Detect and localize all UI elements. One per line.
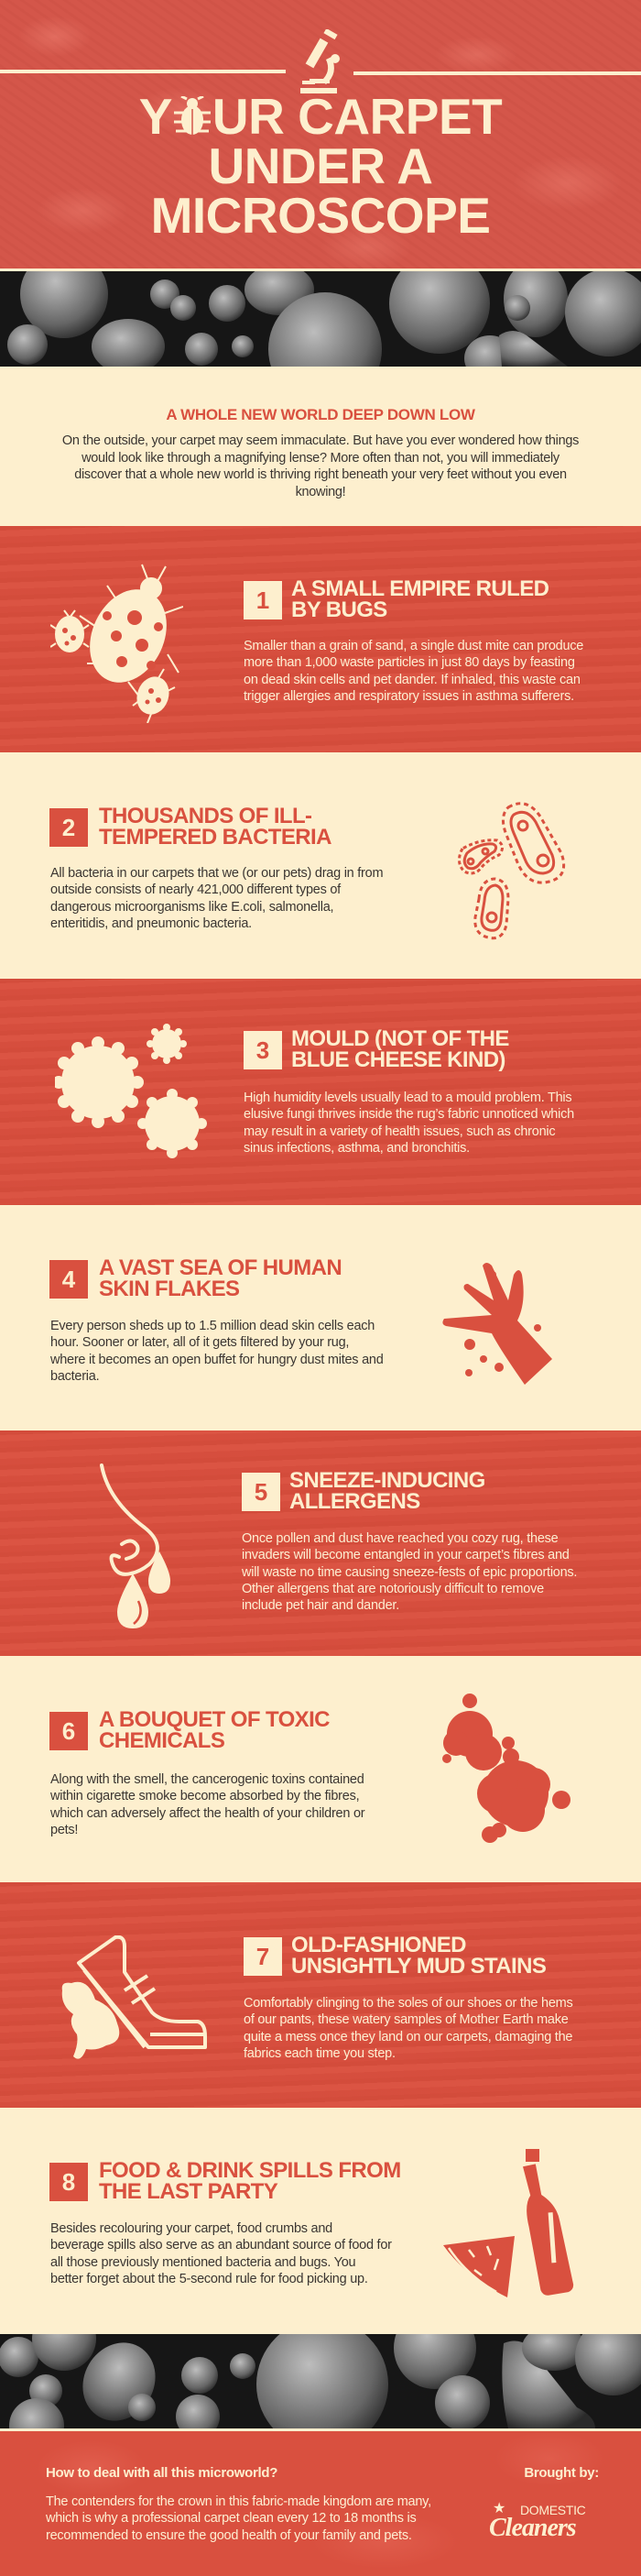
text 7: of our pants, these watery samples of Mother Earth make [244, 2012, 569, 2027]
number 2: 2 [62, 814, 75, 841]
text 5: Once pollen and dust have reached you cozy rug, these [242, 1531, 558, 1546]
number 8 [49, 2163, 88, 2201]
text 7: quite a mess once they land on our carpets, damaging the [244, 2030, 572, 2044]
micro image band top [0, 271, 641, 367]
text 4: hour. Sooner or later, all of it gets filtered by your rug, [50, 1335, 349, 1350]
text 8: Besides recolouring your carpet, food crumbs and [50, 2221, 332, 2236]
footer heading: How to deal with all this microworld? [46, 2465, 277, 2481]
intro text: On the outside, your carpet may seem immaculate. But have you ever wondered how things [62, 433, 579, 448]
text 2 [50, 866, 383, 931]
text 4: Every person sheds up to 1.5 million dead skin cells each [50, 1319, 375, 1333]
text 7 [244, 1996, 573, 2061]
text 2: All bacteria in our carpets that we (or our pets) drag in from [50, 866, 383, 881]
number 6: 6 [62, 1717, 75, 1745]
text 1: more than 1,000 waste particles in just 80 days by feasting [244, 655, 575, 670]
text 8: better forget about the 5-second rule for food picking up. [50, 2272, 368, 2286]
title [139, 88, 502, 244]
text 7: Comfortably clinging to the soles of our shoes or the hems [244, 1996, 572, 2011]
heading 4: SKIN FLAKES [99, 1277, 239, 1301]
panel: 2 bacteria [0, 752, 641, 979]
text 3: sinus infections, asthma, and bronchitis. [244, 1141, 470, 1156]
icon: bacteria [458, 802, 566, 940]
logo: domestic cleaners [489, 2501, 586, 2542]
text 4 [50, 1319, 384, 1384]
number 6 [49, 1712, 88, 1750]
heading 1 [291, 576, 549, 622]
number 1 [244, 581, 282, 619]
number 4: 4 [62, 1266, 75, 1293]
micro image band bottom [0, 2334, 641, 2428]
text 1 [244, 639, 583, 704]
text 6: Along with the smell, the cancerogenic toxins contained [50, 1772, 364, 1787]
heading 8: THE LAST PARTY [99, 2179, 277, 2204]
heading 7: OLD-FASHIONED [291, 1933, 466, 1957]
text 1: Smaller than a grain of sand, a single dust mite can produce [244, 639, 583, 653]
icon: microscope [300, 29, 340, 93]
title: UNDER A [208, 137, 433, 194]
text 7: fabrics each time you step. [244, 2046, 396, 2061]
icon: nose and drops [100, 1463, 170, 1628]
number 2 [49, 808, 88, 847]
footer text: recommended to ensure the good health of your family and pets. [46, 2528, 412, 2543]
heading 2 [99, 804, 331, 850]
text 5: invaders will become entangled in your carpet’s fibres and [242, 1548, 570, 1562]
logo: domestic cleaners: Cleaners [489, 2514, 576, 2542]
text 3: elusive fungi thrives inside the rug’s fabric unnoticed which [244, 1107, 574, 1122]
text 2: outside consists of nearly 421,000 different types of [50, 882, 341, 897]
heading 5 [289, 1468, 485, 1514]
text 8: all those previously mentioned bacteria and bugs. You [50, 2255, 355, 2270]
text 5: include pet hair and dander. [242, 1598, 399, 1613]
heading 6 [99, 1707, 330, 1753]
heading 4: A VAST SEA OF HUMAN [99, 1255, 342, 1280]
icon: ladybugs [50, 565, 183, 723]
number 7 [244, 1937, 282, 1976]
panel: 1 bugs [0, 526, 641, 752]
text 2: enteritidis, and pneumonic bacteria. [50, 916, 252, 931]
number 3 [244, 1031, 282, 1069]
intro panel [62, 406, 579, 499]
panel: 5 allergens [0, 1431, 641, 1657]
number 5: 5 [255, 1478, 267, 1506]
heading 8: FOOD & DRINK SPILLS FROM [99, 2158, 401, 2183]
title: Y UR CARPET [139, 88, 502, 145]
header band [0, 0, 641, 269]
number 4 [49, 1260, 88, 1299]
heading 8 [99, 2158, 401, 2204]
panel: 3 mould [0, 979, 641, 1205]
footer text: which is why a professional carpet clean every 12 to 18 months is [46, 2511, 416, 2526]
footer text: The contenders for the crown in this fabric-made kingdom are many, [46, 2494, 431, 2509]
text 5: will waste no time causing sneeze-fests of epic proportions. [242, 1565, 577, 1580]
text 6: pets! [50, 1823, 78, 1837]
heading 6: A BOUQUET OF TOXIC [99, 1707, 330, 1732]
text 6: which can adversely affect the health of your children or [50, 1806, 364, 1821]
icon: pizza and bottle [443, 2149, 573, 2297]
text 5: Other allergens that are notoriously difficult to remove [242, 1582, 544, 1596]
text 3 [244, 1091, 574, 1156]
panel: 4 skin [0, 1205, 641, 1431]
heading 5: ALLERGENS [289, 1489, 420, 1514]
number 7: 7 [256, 1943, 269, 1970]
intro text: would look like through a magnifying lense? More often than not, you will immediately [81, 451, 560, 466]
text 6 [50, 1772, 364, 1837]
panel: 8 food spills [0, 2108, 641, 2334]
title: MICROSCOPE [151, 187, 490, 244]
text 6: within cigarette smoke become absorbed by the fibres, [50, 1789, 359, 1803]
text 4: where it becomes an open buffet for hungry dust mites and [50, 1353, 384, 1367]
text 4: bacteria. [50, 1369, 99, 1384]
panel: 6 toxic chemicals [0, 1656, 641, 1882]
heading 5: SNEEZE-INDUCING [289, 1468, 485, 1493]
heading 3: MOULD (NOT OF THE [291, 1026, 509, 1051]
brought by: Brought by: [524, 2465, 599, 2481]
number 8: 8 [62, 2168, 75, 2196]
heading 1: A SMALL EMPIRE RULED [291, 576, 549, 601]
heading 4 [99, 1255, 342, 1301]
text 2: dangerous microorganisms like E.coli, salmonella, [50, 900, 333, 915]
icon: hand [442, 1263, 552, 1385]
heading 1: BY BUGS [291, 597, 387, 622]
logo: domestic cleaners: ★ [493, 2501, 505, 2516]
number 5 [242, 1473, 280, 1511]
heading 2: THOUSANDS OF ILL- [99, 804, 311, 828]
intro text [62, 433, 579, 499]
footer panel [0, 2431, 641, 2576]
icon: shoe with mud [62, 1935, 207, 2059]
footer text [46, 2494, 431, 2543]
text 3: may result in a variety of health issues, such as chronic [244, 1124, 555, 1139]
text 5 [242, 1531, 577, 1613]
heading 7: UNSIGHTLY MUD STAINS [291, 1954, 546, 1979]
number 1: 1 [256, 586, 269, 614]
text 1: on dead skin cells and pet dander. If inhaled, this waste can [244, 673, 581, 687]
text 8 [50, 2221, 392, 2286]
text 1: trigger allergies and respiratory issues in asthma sufferers. [244, 689, 574, 704]
intro text: discover that a whole new world is thriving right beneath your very feet without you even [74, 467, 567, 482]
heading 3: BLUE CHEESE KIND) [291, 1047, 505, 1072]
text 8: beverage spills also serve as an abundant source of food for [50, 2238, 392, 2253]
text 3: High humidity levels usually lead to a mould problem. This [244, 1091, 571, 1105]
intro text: knowing! [296, 484, 345, 499]
heading 6: CHEMICALS [99, 1728, 224, 1753]
panel: 7 mud stains [0, 1882, 641, 2109]
heading 3 [291, 1026, 509, 1072]
icon: smoke blobs [442, 1694, 570, 1843]
icon: mould spores [55, 1024, 207, 1158]
heading 7 [291, 1933, 546, 1979]
logo: domestic cleaners: DOMESTIC [520, 2503, 586, 2517]
number 3: 3 [256, 1036, 269, 1064]
heading 2: TEMPERED BACTERIA [99, 825, 331, 850]
intro heading: A WHOLE NEW WORLD DEEP DOWN LOW [166, 406, 475, 423]
